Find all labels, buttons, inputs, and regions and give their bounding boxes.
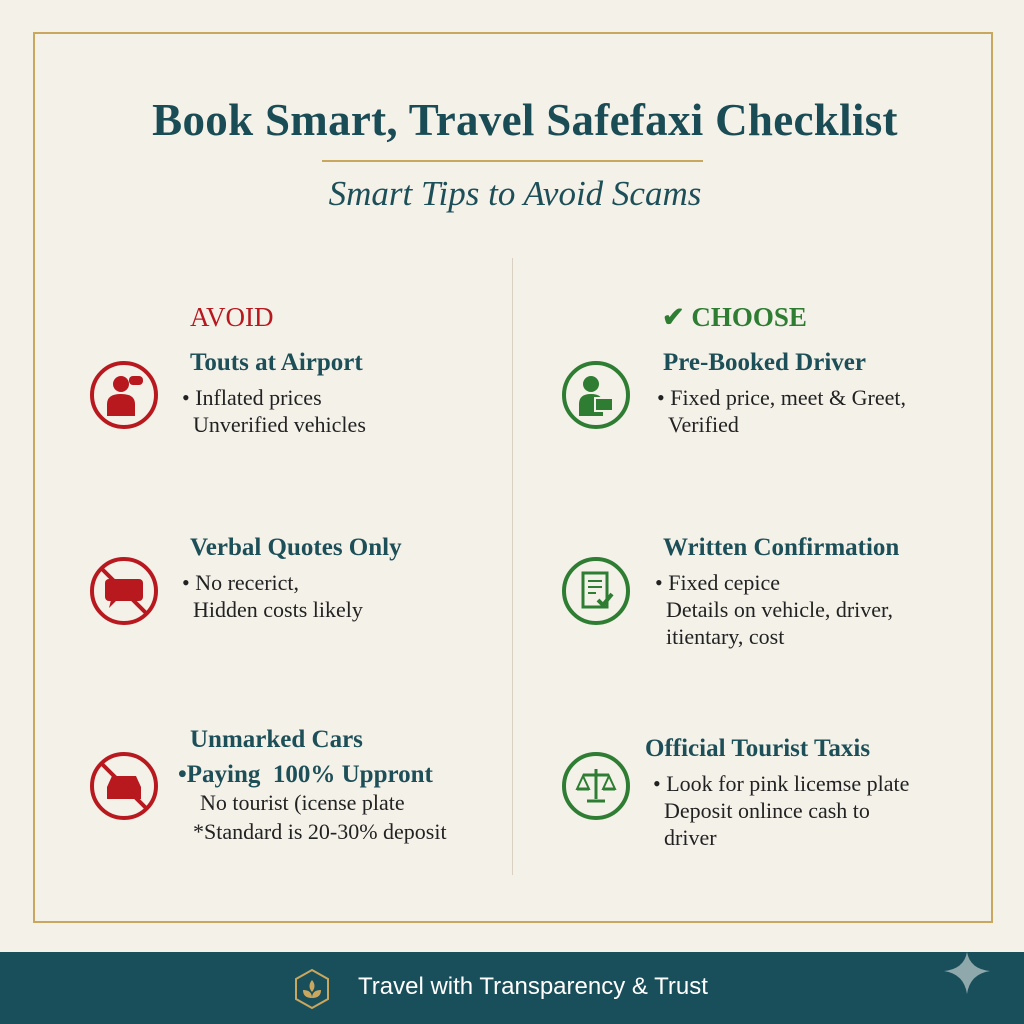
- avoid 2 text: Verbal Quotes Only: [190, 534, 402, 561]
- avoid 3 text: [178, 726, 447, 844]
- choose 3 text: • Look for pink licemse plate: [653, 771, 909, 796]
- avoid 1 text: • Inflated prices: [182, 385, 322, 410]
- avoid 1 text: [182, 349, 366, 437]
- icon: verbal: [90, 557, 158, 625]
- avoid 1 text: Touts at Airport: [190, 349, 363, 376]
- sparkle: [944, 952, 990, 994]
- avoid 2 text: [182, 534, 402, 622]
- gold rule: [322, 160, 703, 162]
- choose 1 text: [657, 349, 906, 437]
- choose 2 text: [655, 534, 899, 649]
- icon: scale: [562, 752, 630, 820]
- choose 1 text: • Fixed price, meet & Greet,: [657, 385, 906, 410]
- subtitle: Smart Tips to Avoid Scams: [329, 174, 701, 213]
- title: Book Smart, Travel Safefaxi Checklist: [152, 95, 898, 145]
- icon: car: [90, 752, 158, 820]
- choose 1 text: Pre-Booked Driver: [663, 349, 866, 376]
- avoid 3 text: No tourist (icense plate: [200, 790, 405, 815]
- choose 2 text: Details on vehicle, driver,: [666, 597, 893, 622]
- avoid 3 text: *Standard is 20-30% deposit: [193, 819, 447, 844]
- heading: choose: ✔ CHOOSE: [662, 302, 807, 332]
- choose 2 text: itientary, cost: [666, 624, 784, 649]
- choose 3 text: Official Tourist Taxis: [645, 735, 870, 762]
- footer: [0, 952, 1024, 1024]
- avoid 2 text: • No recerict,: [182, 570, 299, 595]
- footer logo: [295, 968, 329, 1010]
- icon: tout: [90, 361, 158, 429]
- icon: driver: [562, 361, 630, 429]
- heading: avoid: AVOID: [190, 302, 274, 332]
- choose 3 text: driver: [664, 825, 717, 850]
- avoid 3 text: Unmarked Cars: [190, 726, 363, 753]
- divider: [512, 258, 513, 875]
- footer text: Travel with Transparency & Trust: [358, 973, 708, 1000]
- choose 3 text: [645, 735, 909, 850]
- icon: document: [562, 557, 630, 625]
- avoid 3 text: •Paying 100% Uppront: [178, 761, 433, 788]
- avoid 2 text: Hidden costs likely: [193, 597, 363, 622]
- choose 2 text: Written Confirmation: [663, 534, 899, 561]
- choose 2 text: • Fixed cepice: [655, 570, 780, 595]
- avoid 1 text: Unverified vehicles: [193, 412, 366, 437]
- choose 3 text: Deposit onlince cash to: [664, 798, 870, 823]
- choose 1 text: Verified: [668, 412, 739, 437]
